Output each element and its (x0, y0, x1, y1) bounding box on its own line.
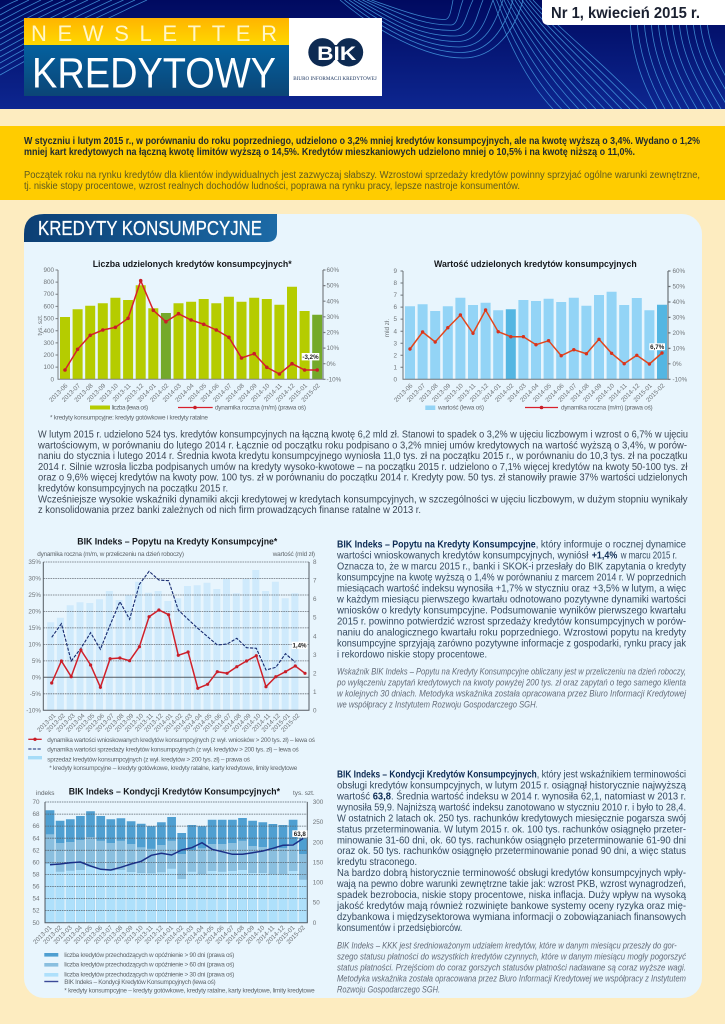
chart: BIK Indeks popytu: 1,4% (292, 643, 307, 650)
text block: BIK Indeks kondycji: Na bardzo dobrą historycznie terminowość obsługi kredytów konsumpcyjnych wpły- (337, 868, 686, 879)
chart: BIK Indeks popytu: 2014-05 (192, 712, 214, 734)
chart: BIK Indeks kondycji: 2014-04 (184, 924, 206, 946)
text block: komentarz kredyty konsumpcyjne: wartościowym, w porównaniu do lutego 2014 r. Łącznie od początku roku podpisano o 3,2% mniej umów kredytowych na wartość wyższą o 3,4%, w porów- (37, 440, 687, 451)
chart: wartosc udzielonych kredytow: 2014-07 (557, 382, 579, 404)
chart: BIK Indeks popytu: 2014-10 (241, 712, 263, 734)
chart: wartosc udzielonych kredytow: 10% (672, 346, 686, 352)
chart: BIK Indeks kondycji: 63,8 (294, 831, 306, 838)
chart: liczba udzielonych kredytow: 200 (43, 352, 54, 359)
chart: BIK Indeks kondycji: tys. szt. (293, 790, 315, 797)
chart: BIK Indeks kondycji: liczba kredytów przechodzących w opóźnienie > 60 dni (prawa oś) (64, 962, 234, 969)
chart: liczba udzielonych kredytow: 2014-09 (237, 382, 259, 404)
chart: liczba udzielonych kredytow: tys. szt. (37, 314, 44, 336)
chart: BIK Indeks popytu: 2013-06 (85, 712, 106, 734)
note: metodyka kondycji: Rozwoju Gospodarczego SGH. (337, 984, 440, 994)
text block: BIK Indeks kondycji: , który jest wskaźnikiem terminowości (537, 770, 686, 781)
chart: BIK Indeks popytu: 2013-11 (134, 712, 155, 733)
chart: BIK Indeks popytu: 2014-09 (231, 712, 253, 734)
chart: BIK Indeks kondycji: 2014-05 (194, 924, 216, 946)
masthead: newsletter title: NEWSLETTER (31, 21, 277, 46)
logo: BIK (289, 18, 382, 96)
chart: BIK Indeks kondycji: 2014-09 (235, 924, 256, 946)
chart: BIK Indeks popytu: 2014-07 (212, 712, 233, 734)
chart: BIK Indeks kondycji: BIK Indeks – Kondycji Kredytów Konsumpcyjnych (lewa oś) (64, 979, 216, 986)
chart: BIK Indeks popytu: 5% (32, 658, 41, 665)
chart: liczba udzielonych kredytow: * kredyty konsumpcyjne: kredyty gotówkowe i kredyty ratalne (50, 414, 208, 422)
chart: BIK Indeks popytu: -5% (30, 691, 41, 698)
chart: BIK Indeks kondycji: liczba kredytów przechodzących w opóźnienie > 90 dni (prawa oś) (64, 952, 234, 959)
chart: liczba udzielonych kredytow: 2014-01 (136, 382, 158, 404)
chart: wartosc udzielonych kredytow: 2014-03 (507, 382, 528, 404)
chart: liczba udzielonych kredytow: 2013-11 (112, 382, 133, 403)
chart: liczba udzielonych kredytow (37, 259, 342, 422)
chart: BIK Indeks kondycji: * kredyty konsumpcyjne – kredyty gotówkowe, kredyty ratalne, karty kredytowe, limity kredytowe (64, 987, 315, 994)
chart: BIK Indeks kondycji: liczba kredytów przechodzących w opóźnienie > 30 dni (prawa oś) (64, 972, 234, 978)
chart: BIK Indeks kondycji: 58 (32, 872, 40, 878)
chart: BIK Indeks popytu: 2015-02 (280, 712, 302, 734)
chart: BIK Indeks popytu: 0 (313, 707, 317, 714)
chart: liczba udzielonych kredytow: dynamika roczna (m/m) (prawa oś) (215, 404, 306, 412)
chart: wartosc udzielonych kredytow: 6,7% (650, 344, 665, 351)
chart: liczba udzielonych kredytow: 900 (43, 267, 54, 274)
chart: wartosc udzielonych kredytow: wartość (lewa oś) (437, 404, 484, 412)
chart: wartosc udzielonych kredytow: 2015-01 (633, 382, 654, 404)
chart: liczba udzielonych kredytow: 2014-06 (199, 382, 221, 404)
chart: liczba udzielonych kredytow: 2014-03 (162, 382, 183, 404)
chart: BIK Indeks kondycji: 100 (313, 880, 324, 887)
chart: liczba udzielonych kredytow: 500 (43, 316, 54, 323)
text block: BIK Indeks kondycji: 63,8 (373, 792, 391, 802)
chart: BIK Indeks kondycji: indeks (36, 790, 54, 797)
chart: liczba udzielonych kredytow: 800 (43, 279, 54, 286)
chart: wartosc udzielonych kredytow: 50% (672, 284, 686, 291)
chart: wartosc udzielonych kredytow: 2014-12 (620, 382, 642, 404)
chart: wartosc udzielonych kredytow: 2 (393, 352, 397, 359)
text block: BIK Indeks kondycji: W ostatnich 2 latach ok. 250 tys. rachunków kredytowych miesięcznie pogarsza swój (337, 813, 686, 824)
chart: wartosc udzielonych kredytow: 5 (393, 316, 397, 323)
chart: wartosc udzielonych kredytow: 2014-02 (494, 382, 516, 404)
chart: BIK Indeks popytu: 7 (313, 578, 317, 585)
chart: BIK Indeks popytu: 2015-01 (270, 712, 292, 734)
chart: BIK Indeks popytu: 10% (28, 642, 41, 648)
chart: BIK Indeks popytu: 1 (313, 689, 317, 696)
chart: BIK Indeks popytu: 3 (313, 652, 317, 659)
chart: wartosc udzielonych kredytow: 8 (393, 280, 397, 287)
text block: komentarz kredyty konsumpcyjne: naniu do stycznia i lutego 2014 r. Średnia kwota kredytu konsumpcyjnego wyniosła 11,0 tys. zł na początku 2015 r., w porównaniu do 10,3 tys. zł na początku (38, 449, 688, 462)
chart: BIK Indeks kondycji: 2013-09 (113, 924, 135, 946)
chart: BIK Indeks popytu: 2013-03 (55, 712, 77, 734)
chart: BIK Indeks kondycji: 2013-06 (83, 924, 104, 946)
text block: BIK Indeks kondycji: . Średnia wartość indeksu w 2014 r. wynosiła 62,1, natomiast w 2013 r. (391, 790, 686, 802)
chart: liczba udzielonych kredytow: 2015-01 (288, 382, 309, 404)
chart: BIK Indeks kondycji: 200 (313, 839, 324, 846)
chart: BIK Indeks popytu: 2013-07 (94, 712, 116, 734)
chart: BIK Indeks popytu: 0% (32, 674, 41, 681)
text block: BIK Indeks popytu: naniu do analogicznego kwartału roku poprzedniego. Wzrostowi popytu na kredyty (337, 628, 687, 638)
chart: liczba udzielonych kredytow: 300 (43, 340, 54, 347)
chart: BIK Indeks popytu: 2014-03 (173, 712, 194, 734)
chart: liczba udzielonych kredytow: 40% (326, 298, 340, 305)
chart: BIK Indeks popytu: 20% (28, 608, 41, 616)
chart: liczba udzielonych kredytow: 2013-12 (124, 382, 145, 404)
text block: BIK Indeks kondycji: wają na pewno dobre warunki zewnętrzne takie jak: wzrost PKB, wzrost wynagrodzeń, (336, 879, 686, 890)
chart: BIK Indeks popytu: 2014-08 (221, 712, 243, 734)
chart: liczba udzielonych kredytow: 0 (50, 376, 54, 383)
chart: wartosc udzielonych kredytow: 2015-02 (645, 382, 667, 404)
chart: wartosc udzielonych kredytow: 2013-09 (431, 382, 453, 404)
chart: BIK Indeks popytu: 2014-11 (251, 712, 272, 733)
chart: BIK Indeks popytu: 6 (313, 596, 317, 603)
text block: BIK Indeks kondycji: konsumentów i przedsiębiorców. (337, 923, 462, 934)
chart: wartosc udzielonych kredytow: 2014-04 (519, 382, 541, 404)
chart: BIK Indeks kondycji: 56 (32, 884, 40, 891)
chart: liczba udzielonych kredytow: 2014-04 (174, 382, 196, 404)
issue number badge: Nr 1, kwiecień 2015 r. (551, 5, 700, 22)
note: metodyka popytu (336, 667, 687, 709)
chart: BIK Indeks kondycji: 52 (32, 908, 40, 915)
chart: BIK Indeks kondycji: 300 (313, 799, 324, 806)
chart: BIK Indeks popytu: 2014-12 (261, 712, 282, 734)
chart: BIK Indeks kondycji: 2013-08 (103, 924, 125, 946)
chart: wartosc udzielonych kredytow: 1 (393, 364, 397, 371)
section heading: KREDYTY KONSUMPCYJNE (38, 218, 262, 240)
chart: BIK Indeks kondycji: 2014-01 (154, 924, 175, 946)
chart: BIK Indeks kondycji: 2013-02 (42, 924, 64, 946)
text block: BIK Indeks popytu (336, 540, 687, 660)
text block: BIK Indeks popytu: konsumpcyjne sprzyjają zarówno pozytywne informacje z gospodarki, rynku pracy jak (337, 638, 687, 650)
text block: komentarz kredyty konsumpcyjne: oraz o 9,6% więcej kredytów na kwoty pow. 100 tys. zł w porównaniu do początku 2014 r. Kredyty pow. 50 tys. zł stanowiły prawie 37% wartości udzielonych (38, 473, 688, 484)
chart: liczba udzielonych kredytow: 20% (326, 330, 340, 337)
chart: BIK Indeks kondycji: 2014-11 (255, 924, 277, 945)
chart: BIK Indeks popytu: 2013-10 (124, 712, 145, 734)
chart: liczba udzielonych kredytow: 2013-09 (86, 382, 108, 404)
chart: BIK Indeks kondycji: 2013-03 (52, 924, 74, 946)
text block: BIK Indeks kondycji: jakość kredytów mają również rozwinięte bankowe systemy oceny ryzyka oraz mię- (336, 901, 686, 912)
chart: liczba udzielonych kredytow: 2013-07 (61, 382, 82, 404)
chart: wartosc udzielonych kredytow: 6 (393, 304, 397, 311)
chart: liczba udzielonych kredytow: 2014-08 (225, 382, 246, 404)
chart: liczba udzielonych kredytow: 2013-10 (99, 382, 120, 404)
chart: wartosc udzielonych kredytow: 2014-08 (570, 382, 591, 404)
chart: BIK Indeks popytu: 35% (28, 559, 41, 566)
chart: BIK Indeks kondycji: 2014-02 (164, 924, 185, 946)
chart: wartosc udzielonych kredytow: 2014-05 (532, 382, 553, 404)
text block: BIK Indeks popytu: wartości wnioskowanych kredytów konsumpcyjnych, wyniósł (336, 550, 589, 562)
chart: BIK Indeks popytu: dynamika wartości wnioskowanych kredytów konsumpcyjnych (z wył. wniosków > 200 tys. zł) – lewa oś (47, 737, 315, 744)
chart: wartosc udzielonych kredytow: 3 (393, 340, 397, 347)
chart: BIK Indeks kondycji: 2014-08 (225, 924, 246, 946)
text block: BIK Indeks popytu: i rekordowo niskie stopy procentowe. (337, 650, 487, 660)
summary band: tj. niskie stopy procentowe, wzrost realnych dochodów ludności, poprawa na rynku pracy, lepsze nastroje konsumentów. (24, 181, 520, 192)
chart: BIK Indeks kondycji: 62 (32, 847, 40, 854)
chart: BIK Indeks kondycji: 2014-12 (265, 924, 287, 946)
chart: BIK Indeks popytu: 8 (313, 559, 317, 566)
text block: BIK Indeks popytu: +1,4% (592, 550, 617, 562)
masthead: newsletter title (24, 18, 289, 98)
chart: BIK Indeks kondycji: 2014-06 (204, 924, 226, 946)
issue number badge (542, 0, 725, 25)
text block: BIK Indeks kondycji: kredytu straconego. (337, 857, 417, 868)
chart: liczba udzielonych kredytow: 700 (43, 291, 54, 298)
chart: wartosc udzielonych kredytow: 30% (672, 314, 686, 322)
chart: BIK Indeks popytu: -10% (26, 707, 41, 714)
chart: BIK Indeks popytu: dynamika roczna (m/m, w przeliczeniu na dzień roboczy) (37, 551, 184, 558)
chart: wartosc udzielonych kredytow: -10% (672, 376, 688, 383)
chart: BIK Indeks popytu: 25% (28, 592, 41, 599)
header banner (0, 0, 725, 109)
chart: BIK Indeks kondycji: 2013-05 (73, 924, 94, 946)
chart: BIK Indeks kondycji: 2014-07 (215, 924, 236, 946)
chart: BIK Indeks kondycji: BIK Indeks – Kondycji Kredytów Konsumpcyjnych* (69, 787, 280, 798)
chart: BIK Indeks popytu: 2014-04 (182, 712, 204, 734)
chart: wartosc udzielonych kredytow: 0% (672, 361, 682, 368)
text block: BIK Indeks popytu: Oznacza to, że w marcu 2015 r., banki i SKOK-i przesłały do BIK zapytania o kredyty (337, 562, 687, 572)
note: metodyka popytu: we współpracy z Instytutem Rozwoju Gospodarczego SGH. (337, 699, 538, 709)
chart: BIK Indeks kondycji: 0 (313, 920, 317, 927)
chart: wartosc udzielonych kredytow: 0 (393, 376, 397, 383)
text block: BIK Indeks kondycji: spadek bezrobocia, niskie stopy procentowe, niska inflacja. Duży wpływ na wysoką (337, 890, 686, 901)
chart: wartosc udzielonych kredytow: mld zł. (384, 319, 391, 337)
chart: BIK Indeks kondycji: 2014-10 (245, 924, 267, 946)
chart: BIK Indeks popytu: sprzedaż kredytów konsumpcyjnych (z wył. kredytów > 200 tys. zł) – prawa oś (47, 757, 250, 764)
chart: liczba udzielonych kredytow: 2013-06 (48, 382, 70, 404)
chart: liczba udzielonych kredytow: Liczba udzielonych kredytów konsumpcyjnych* (93, 259, 292, 270)
text block: BIK Indeks popytu: w marcu 2015 r. (620, 550, 677, 562)
chart: wartosc udzielonych kredytow: 2014-10 (595, 382, 616, 404)
chart: BIK Indeks kondycji (32, 787, 324, 994)
chart: liczba udzielonych kredytow: 2014-02 (149, 382, 171, 404)
chart: BIK Indeks kondycji: 2015-02 (285, 924, 307, 946)
chart: BIK Indeks kondycji: 2013-11 (134, 924, 155, 945)
chart: liczba udzielonych kredytow: -10% (326, 376, 342, 383)
chart: liczba udzielonych kredytow: 2014-05 (187, 382, 208, 404)
chart: liczba udzielonych kredytow: -3,2% (302, 354, 319, 361)
text block: BIK Indeks kondycji: obsługi kredytów konsumpcyjnych, w lutym 2015 r. osiągnął historycznie najwyższą (337, 780, 686, 792)
chart: liczba udzielonych kredytow: 10% (326, 345, 340, 352)
chart: liczba udzielonych kredytow: 400 (43, 328, 54, 335)
chart: liczba udzielonych kredytow: 2014-11 (263, 382, 284, 403)
chart: liczba udzielonych kredytow: 30% (326, 314, 340, 321)
chart: BIK Indeks kondycji: 150 (313, 860, 324, 866)
chart: BIK Indeks popytu: 2014-06 (202, 712, 224, 734)
chart: liczba udzielonych kredytow: 2014-10 (250, 382, 272, 404)
text block: BIK Indeks kondycji (336, 770, 686, 934)
text block: BIK Indeks popytu: , który informuje o rocznej dynamice (536, 540, 686, 550)
note: metodyka kondycji: status płatności. Przejściom do coraz gorszych statusów płatności nadawane są coraz wyższe wagi. (337, 962, 686, 972)
chart: BIK Indeks kondycji: 250 (313, 819, 324, 826)
chart: wartosc udzielonych kredytow: 2013-11 (456, 382, 478, 403)
text block: komentarz kredyty konsumpcyjne: z konsolidowania przez banki zależnych od nich firm prowadzących finanse ratalne w 2013 r. (38, 505, 421, 516)
chart: BIK Indeks kondycji: 2013-01 (32, 924, 54, 946)
chart: BIK Indeks kondycji: 50 (32, 920, 40, 927)
chart: wartosc udzielonych kredytow: 9 (393, 268, 397, 275)
chart: wartosc udzielonych kredytow: Wartość udzielonych kredytów konsumpcyjnych (434, 259, 637, 270)
note: metodyka popytu: w kolejnych 30 dniach. Metodyka wskaźnika została opracowana przez Biuro Informacji Kredytowej (337, 688, 687, 698)
summary band (0, 126, 725, 200)
chart: BIK Indeks kondycji: 2013-07 (93, 924, 115, 946)
chart: wartosc udzielonych kredytow: 60% (672, 268, 686, 275)
chart: BIK Indeks kondycji: 68 (32, 811, 40, 818)
chart: BIK Indeks popytu: BIK Indeks – Popytu na Kredyty Konsumpcyjne* (77, 537, 278, 548)
text block: BIK Indeks popytu: BIK Indeks – Popytu na Kredyty Konsumpcyjne (337, 540, 536, 550)
text block: komentarz kredyty konsumpcyjne: Wcześniejsze wysokie wskaźniki dynamiki akcji kredytowej w kredytach konsumpcyjnych, w szczególności w ujęciu liczbowym, w dużym stopniu wynikały (38, 494, 688, 505)
chart: BIK Indeks kondycji: 50 (313, 900, 320, 907)
chart: wartosc udzielonych kredytow: 2013-12 (469, 382, 490, 404)
chart: BIK Indeks kondycji: 70 (32, 799, 40, 806)
chart: liczba udzielonych kredytow: 50% (326, 283, 340, 290)
chart: BIK Indeks popytu: 30% (28, 576, 41, 582)
chart: BIK Indeks popytu: 2013-12 (143, 712, 165, 734)
chart: BIK Indeks kondycji: 66 (32, 823, 40, 830)
text block: BIK Indeks kondycji: oraz ok. 50 tys. rachunków osiągnęło przeterminowanie ponad 90 dni, a więc status (337, 846, 686, 857)
chart: wartosc udzielonych kredytow: 2014-06 (544, 382, 566, 404)
chart: BIK Indeks popytu: 2013-02 (46, 712, 67, 734)
chart: wartosc udzielonych kredytow: 2014-09 (582, 382, 604, 404)
chart: BIK Indeks kondycji: 2013-12 (144, 924, 165, 946)
chart: BIK Indeks popytu: 2013-01 (36, 712, 58, 734)
chart: wartosc udzielonych kredytow: dynamika roczna (m/m) (prawa oś) (561, 404, 653, 412)
chart: BIK Indeks popytu: 2 (313, 670, 317, 677)
chart: liczba udzielonych kredytow: 100 (43, 364, 54, 371)
text block: BIK Indeks kondycji: minowanie 31-60 dni, ok. 60 tys. rachunków osiągnęło przeterminowanie 61-90 dni (337, 835, 686, 846)
chart: liczba udzielonych kredytow: 600 (43, 304, 54, 310)
chart: BIK Indeks kondycji: 2013-04 (63, 924, 84, 946)
text block: BIK Indeks kondycji: BIK Indeks – Kondycji Kredytów Konsumpcyjnych (337, 770, 537, 781)
text block: BIK Indeks popytu: w każdym miesiącu pierwszego kwartału odnotowano pozytywne dynamiki wartości (336, 594, 686, 606)
chart: BIK Indeks popytu: 5 (313, 615, 317, 622)
chart: liczba udzielonych kredytow: liczba (lewa oś) (112, 404, 148, 412)
chart: wartosc udzielonych kredytow: 20% (672, 330, 686, 337)
text block: komentarz kredyty konsumpcyjne: kredytów konsumpcyjnych na początku 2015 r. (38, 484, 228, 494)
chart: BIK Indeks popytu: 15% (28, 625, 41, 632)
chart: wartosc udzielonych kredytow: 2013-08 (418, 382, 440, 404)
chart: BIK Indeks kondycji: 2015-01 (275, 924, 297, 946)
chart: liczba udzielonych kredytow: 2014-12 (275, 382, 297, 404)
panel: kredyty konsumpcyjne (24, 214, 702, 998)
logo: BIK: BIK (317, 43, 356, 65)
chart: liczba udzielonych kredytow: 2015-02 (300, 382, 322, 404)
chart: wartosc udzielonych kredytow: 2014-11 (608, 382, 629, 403)
chart: liczba udzielonych kredytow: 2014-07 (212, 382, 234, 404)
chart: BIK Indeks popytu: 2013-08 (104, 712, 126, 734)
chart: BIK Indeks popytu: 2013-09 (114, 712, 136, 734)
masthead: newsletter title: KREDYTOWY (32, 50, 276, 98)
chart: BIK Indeks popytu: 2014-02 (163, 712, 184, 734)
chart: BIK Indeks kondycji: 2014-03 (174, 924, 196, 946)
chart: BIK Indeks kondycji: 60 (32, 860, 40, 866)
chart: BIK Indeks popytu: 4 (313, 633, 317, 640)
chart: BIK Indeks popytu: 2013-05 (75, 712, 97, 734)
chart: BIK Indeks popytu (26, 537, 317, 772)
chart: wartosc udzielonych kredytow: 2013-10 (444, 382, 465, 404)
chart: wartosc udzielonych kredytow: 2013-06 (393, 382, 415, 404)
text block: BIK Indeks kondycji: status przeterminowania. W lutym 2015 r. ok. 100 tys. rachunków osiągnęło przeter- (337, 824, 686, 835)
text block: BIK Indeks kondycji: wartość (336, 792, 370, 802)
chart: BIK Indeks kondycji: 64 (32, 835, 40, 842)
chart: BIK Indeks popytu: 2014-01 (153, 712, 175, 734)
text block: BIK Indeks kondycji: dzybankowa i międzysektorowa wymiana informacji o zobowiązaniach finansowych (337, 912, 686, 923)
text block: BIK Indeks popytu: miesiącach wartość indeksu wynosiła +1,7% w styczniu oraz +3,5% w lutym, a więc (337, 584, 686, 594)
chart: wartosc udzielonych kredytow: 2013-07 (406, 382, 427, 404)
chart: liczba udzielonych kredytow: 0% (326, 361, 336, 368)
summary band: mniej kart kredytowych na łączną kwotę limitów wyższą o 14,5%. Kredytów mieszkaniowych udzielono mniej o 10,5% i na kwotę niższą o 11,0%. (24, 147, 635, 158)
chart: BIK Indeks popytu: 2013-04 (65, 712, 87, 734)
chart: wartosc udzielonych kredytow: 40% (672, 299, 686, 306)
chart: BIK Indeks popytu: dynamika wartości sprzedaży kredytów konsumpcyjnych (z wył. kredytów > 200 tys. zł) – lewa oś (47, 747, 299, 754)
logo: BIK: BIURO INFORMACJI KREDYTOWEJ (293, 76, 377, 82)
text block: BIK Indeks popytu: wniosków o kredyty konsumpcyjne. Podsumowanie wyników pierwszego kwartału (336, 606, 686, 616)
chart: BIK Indeks popytu: wartość (mld zł) (272, 551, 315, 558)
chart: wartosc udzielonych kredytow (384, 259, 688, 412)
chart: wartosc udzielonych kredytow: 7 (393, 292, 397, 299)
text block: komentarz kredyty konsumpcyjne: 2014 r. Silnie wzrosła liczba podpisanych umów na kredyty wysoko-kwotowe – na początku 2015 r. udzielono o 7,1% więcej kredytów na kwoty 50-100 tys. zł (38, 462, 688, 473)
chart: BIK Indeks popytu: * kredyty konsumpcyjne – kredyty gotówkowe, kredyty ratalne, karty kredytowe, limity kredytowe (49, 765, 298, 772)
chart: wartosc udzielonych kredytow: 2014-01 (481, 382, 503, 404)
chart: wartosc udzielonych kredytow: 4 (393, 328, 397, 335)
note: metodyka kondycji (337, 940, 686, 994)
chart: liczba udzielonych kredytow: 2013-08 (73, 382, 95, 404)
text block: BIK Indeks popytu: 2015 r. powinno potwierdzić wzrost sprzedaży kredytów konsumpcyjnych w porów- (337, 616, 686, 628)
text block: komentarz kredyty konsumpcyjne (37, 430, 688, 516)
chart: BIK Indeks kondycji: 54 (32, 896, 40, 903)
chart: liczba udzielonych kredytow: 60% (326, 267, 340, 274)
chart: BIK Indeks kondycji: 2013-10 (123, 924, 145, 946)
section heading (24, 214, 277, 242)
